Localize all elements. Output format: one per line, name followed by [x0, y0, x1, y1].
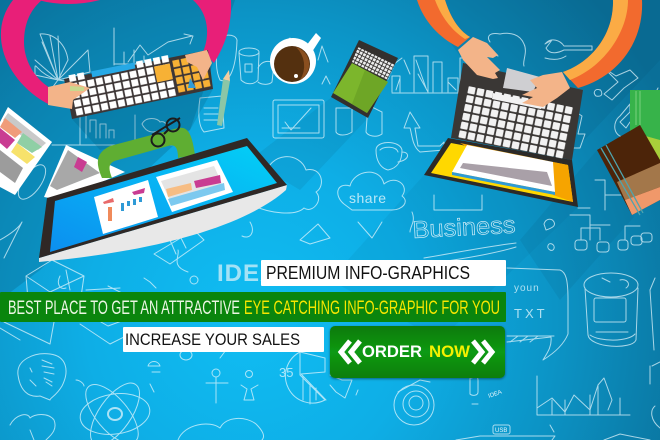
doodle: usb label [456, 425, 650, 440]
brown book [597, 125, 660, 215]
button text: NOW [429, 342, 471, 361]
doodle label: USB: USB [495, 428, 507, 434]
doodle: bar chart lower [52, 96, 224, 145]
pink arm [1, 0, 231, 105]
doodle: arrow up [404, 112, 444, 152]
coffee cup [270, 33, 321, 84]
doodle: tablet checkmark [273, 100, 324, 138]
doodle: cloud [250, 157, 321, 213]
doodle: figures [206, 369, 258, 403]
doodle: cans [216, 35, 274, 84]
button text [362, 342, 471, 361]
banner: best place [0, 292, 506, 322]
doodle: arrow bars [392, 56, 472, 93]
doodle: mountains [284, 38, 330, 84]
doodle: share cloud [338, 172, 405, 210]
doodle: open book [178, 418, 264, 440]
doodle label: IDEA small: IDEA [488, 389, 503, 400]
doodle: right edge shapes [650, 88, 660, 428]
long shadows [0, 0, 660, 340]
doodle: cubes [0, 260, 130, 344]
doodle: dollar icon [544, 219, 555, 250]
doodle: flow chart [570, 172, 652, 252]
banner: best place: BEST PLACE TO GET AN ATTRACTIVE [8, 297, 240, 319]
doodle: pie lower: 35 [279, 365, 293, 380]
doodle: number 3 [10, 414, 55, 440]
right hand on laptop [522, 72, 570, 107]
doodle: can [584, 273, 638, 346]
doodle: atom [76, 375, 152, 440]
doodle: business underline [424, 243, 516, 264]
doodle: coffee [376, 142, 408, 170]
newspaper middle [44, 145, 125, 200]
doodle: people and marks [144, 276, 226, 392]
orange arm [417, 0, 642, 88]
doodle: arrow down [358, 222, 382, 238]
keyboard [64, 50, 213, 119]
doodle: speech bubble [507, 268, 568, 360]
order now button [330, 326, 505, 378]
doodle label: share: share [349, 190, 387, 206]
doodle: line graph [537, 376, 630, 415]
banner: increase your sales: INCREASE YOUR SALES [125, 330, 300, 349]
pencil [217, 70, 230, 126]
doodle label: TXT: TXT [514, 306, 548, 321]
shadow under keyboard [72, 89, 213, 150]
left hand thumb [70, 86, 84, 91]
tablet [39, 138, 287, 262]
doodle: pencil [330, 375, 358, 398]
doodle: arrow strips [0, 222, 330, 264]
phone [331, 40, 398, 118]
banner: premium info-graphics: PREMIUM INFO-GRAPHICS [266, 263, 470, 283]
green book [630, 90, 660, 170]
laptop [424, 63, 583, 207]
doodle: pie chart top left [35, 34, 90, 100]
doodle label: your: youn [514, 283, 540, 294]
green stand and glasses [98, 118, 195, 178]
doodle: paperclip [13, 160, 51, 204]
doodle: squiggle icons [572, 68, 640, 148]
left hand on laptop [458, 37, 500, 79]
doodle label: Business: Business [412, 212, 516, 244]
doodle: line chart [114, 28, 193, 65]
doodle: dots [128, 250, 554, 432]
left chevrons [341, 341, 360, 363]
doodle: shell [394, 380, 434, 425]
newspaper left [0, 107, 52, 195]
doodle label: IDEA: IDEA [217, 260, 278, 287]
doodle: wrench and alarm [488, 33, 592, 66]
left hand [48, 82, 90, 109]
finger on keyboard [188, 78, 196, 88]
right chevrons [473, 341, 492, 363]
button text: ORDER [362, 342, 422, 361]
right hand [185, 50, 212, 80]
doodle: lamp shape [410, 195, 482, 232]
doodle: phones [336, 105, 382, 136]
doodle: bulb [470, 374, 478, 404]
doodle text [217, 190, 548, 434]
banner: best place: EYE CATCHING INFO-GRAPHIC FOR YOU [244, 297, 500, 319]
doodle: speech list [18, 354, 66, 400]
doodle: pie lower [279, 352, 326, 404]
